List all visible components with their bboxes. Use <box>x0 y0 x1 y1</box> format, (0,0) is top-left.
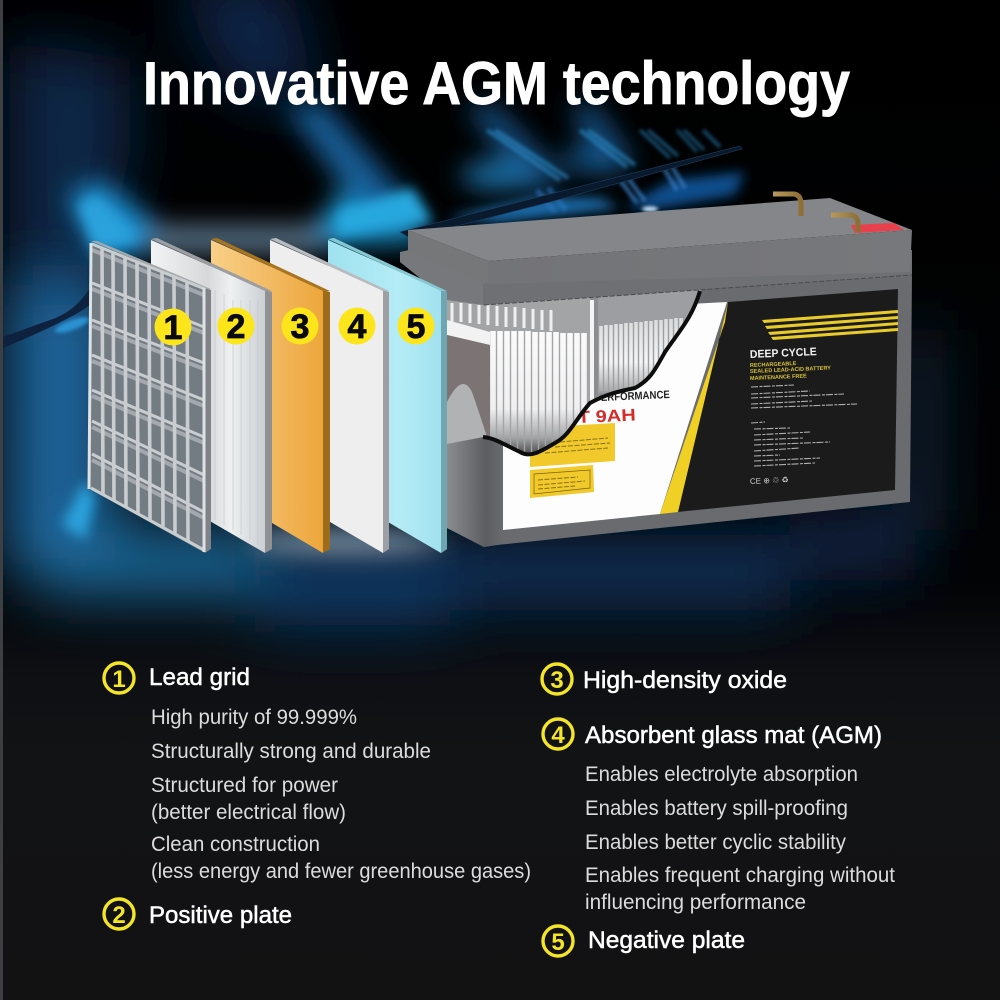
item 1 details <box>151 706 531 883</box>
bright glows <box>68 105 635 553</box>
plate 2: positive plate <box>151 238 272 553</box>
cable <box>400 146 742 238</box>
battery side shading <box>447 435 503 547</box>
cutaway interior <box>447 285 707 460</box>
cable: left <box>3 288 90 348</box>
item 1 heading: Lead grid <box>149 664 250 691</box>
plates <box>88 238 447 553</box>
grid bars <box>89 243 205 552</box>
item 5 heading: 5 <box>551 929 565 956</box>
number badge 2 <box>218 308 254 346</box>
number badge 5: 5 <box>407 308 425 346</box>
number badge 5 <box>398 308 434 346</box>
battery label: CE ⊕ ♲ ♻ <box>750 475 789 486</box>
fin comb top <box>452 303 551 331</box>
item 1 details: Clean construction <box>151 833 320 856</box>
item 1 details: Structurally strong and durable <box>151 740 431 763</box>
battery label: SEALED LEAD-ACID BATTERY <box>750 365 831 375</box>
item 1 heading: 1 <box>112 666 126 693</box>
number badge 1 <box>154 308 192 347</box>
item 3 heading: 3 <box>550 667 564 694</box>
item 5 heading: Negative plate <box>588 927 745 954</box>
item 2 heading <box>104 899 292 929</box>
battery label: MAINTENANCE FREE <box>750 374 807 382</box>
battery label: ERFORMANCE <box>601 389 670 404</box>
soft highlights <box>62 172 745 540</box>
battery label <box>480 289 898 530</box>
title: Innovative AGM technology <box>143 50 851 117</box>
item 1 details: Structured for power <box>151 774 338 797</box>
battery label: RECHARGEABLE <box>750 361 797 369</box>
item 1 details: (better electrical flow) <box>151 801 346 824</box>
item 1 details: (less energy and fewer greenhouse gases) <box>151 860 531 883</box>
item 1 heading <box>104 663 250 693</box>
terminal: negative <box>773 194 801 216</box>
number badge 3: 3 <box>291 308 309 346</box>
number badge 4 <box>338 308 376 346</box>
item 4 details: Enables frequent charging without <box>585 864 895 887</box>
number badge 1: 1 <box>164 309 182 347</box>
item 2 heading: 2 <box>112 902 126 929</box>
plate 1: lead grid <box>88 241 211 553</box>
battery body <box>447 272 912 547</box>
item 4 details: Enables better cyclic stability <box>585 831 846 854</box>
battery <box>400 194 912 547</box>
number badge 4: 4 <box>348 308 367 346</box>
wide glows <box>5 0 933 625</box>
item 4 details: influencing performance <box>585 891 806 914</box>
battery lid <box>400 198 912 305</box>
item 1 details: High purity of 99.999% <box>151 706 357 729</box>
item 2 heading: Positive plate <box>149 902 292 929</box>
light beams <box>487 130 720 212</box>
plate 5: negative plate <box>328 238 447 553</box>
grid inner walls <box>92 250 204 518</box>
item 4 heading: Absorbent glass mat (AGM) <box>585 722 882 749</box>
cutaway edge <box>483 291 700 454</box>
battery label: DEEP CYCLE <box>750 346 817 361</box>
item 4 details <box>585 763 895 914</box>
terminal: positive <box>831 215 858 232</box>
plate 3: high-density oxide <box>211 238 330 553</box>
number badge 2: 2 <box>227 308 245 346</box>
legend: left column <box>104 663 531 929</box>
red terminal pad <box>851 223 904 233</box>
number badge 3 <box>282 308 318 346</box>
battery fins left <box>493 331 584 460</box>
item 4 heading: 4 <box>551 722 565 749</box>
battery label: T 9AH <box>577 405 636 427</box>
item 5 heading <box>543 926 745 956</box>
item 3 heading: High-density oxide <box>583 667 787 694</box>
battery fins right <box>599 318 683 396</box>
item 4 details: Enables electrolyte absorption <box>585 763 858 786</box>
plate 4: absorbent glass mat <box>270 238 389 553</box>
side plate left <box>447 320 490 345</box>
item 4 details: Enables battery spill-proofing <box>585 797 848 820</box>
legend: right column <box>542 664 895 956</box>
